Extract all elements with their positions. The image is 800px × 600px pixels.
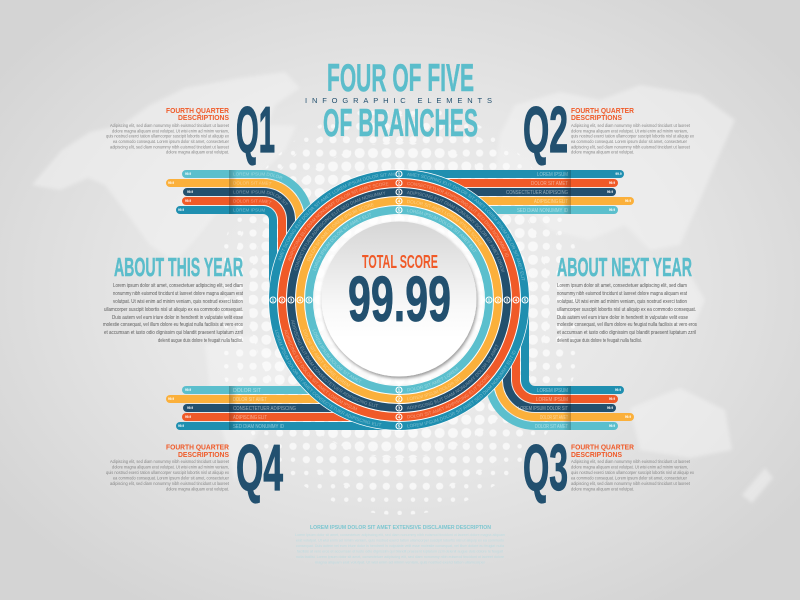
branch Q3 bars: DOLOR SIT AMET [540,415,568,421]
branch Q2 bars: 99.9 [615,172,622,176]
Q4 block: quis nostrud exerci tation ullamcorper suscipit lobortis nisl ut aliquip ex [106,470,230,475]
Q1 block: quis nostrud exerci tation ullamcorper suscipit lobortis nisl ut aliquip ex [106,134,230,139]
halftone dot field [214,105,584,515]
Q2 block: dolore magna aliquam erat volutpat. Ut wisi enim ad minim veniam, [571,128,688,133]
about this year: et accumsan et iusto odio dignissim qui blandit praesent luptatum zzril [104,330,243,336]
about this year: volutpat. Ut wisi enim ad minim veniam, quis nostrud exerci tation [113,299,243,305]
number nodes right: 2 [497,298,500,304]
Q2 block: quis nostrud exerci tation ullamcorper suscipit lobortis nisl ut aliquip ex [571,134,695,139]
concentric ring bands: AMET SCORING ELIT DOLOR SIT AMET LOREM IPSUM DOLOR SIT AMET ELIT [407,172,525,280]
number nodes left: 1 [272,298,275,304]
about next year: volutpat. Ut wisi enim ad minim veniam, quis nostrud exerci tation [557,299,687,305]
number nodes bottom [396,387,402,430]
branch Q2 bars: ADIPISCING ELIT [534,199,568,205]
Q3 block: DESCRIPTIONS [571,450,622,459]
number nodes left: 3 [290,298,293,304]
Q3 block: quis nostrud exerci tation ullamcorper suscipit lobortis nisl ut aliquip ex [571,470,695,475]
concentric ring bands: ADIPISCING ELIT DIAM CONSECTETUER ADIPISCING ELIT [291,320,378,408]
concentric ring bands: DOLOR SIT AMET ADIPISCING ELIT SCORE [407,374,490,418]
branch Q2 bars: 99.9 [607,190,613,194]
number nodes left: 2 [281,298,284,304]
branch Q2 bars: LOREM IPSUM [537,172,568,178]
Q2 block: DESCRIPTIONS [571,113,622,122]
branch Q3 bars: 99.9 [615,388,621,392]
about this year: ABOUT THIS YEAR [114,252,243,282]
branch Q1 bars: DOLOR SIT AMET [233,200,272,204]
number nodes right: 3 [506,298,509,304]
about next year: ullamcorper suscipit lobortis nisl ut aliquip ex ea commodo consequat. [557,307,696,313]
concentric ring bands: DOLOR SIT AMET LOREM IPSUM SCORE [306,203,374,262]
number nodes top: 3 [398,190,401,196]
Q4 block: dolore magna aliquam erat volutpat. Ut wisi enim ad minim veniam, [112,464,229,470]
branch Q2 bars: 99.9 [625,199,631,203]
branch Q1 bars: 99.9 [187,190,193,194]
Q1 block: dolore magna aliquam erat volutpat. [166,150,229,155]
Q1 block [106,93,275,166]
Q3 block: ea commodo consequat. Lorem ipsum dolor sit amet, consectetuer [571,476,687,480]
branch Q3 bars: LOREM IPSUM [537,388,568,394]
disclaimer [295,525,505,564]
number nodes right: 5 [524,298,527,304]
central score disc [314,215,484,385]
branch Q4 bars: 99.9 [178,424,184,428]
branch Q3 bars: 99.9 [607,406,613,410]
Q1 block: adipiscing elit, sed diam nonummy nibh euismod tincidunt ut laoreet [110,144,230,149]
about next year: delenit augue duis dolore te feugait nulla facilisi. [557,338,642,344]
branch Q2 bars: SED DIAM NONUMMY ID [517,208,568,214]
Q4 block: adipiscing elit, sed diam nonummy nibh euismod tincidunt ut laoreet [110,481,230,486]
branch Q1 bars: 99.9 [168,181,174,185]
about this year: nonummy nibh euismod tincidunt ut laoreet dolore magna aliquam erat [113,291,243,297]
branch Q1 bars: DOLOR SIT AMET [233,182,272,186]
concentric ring bands: LOREM IPSUM DOLOR SIT AMET [312,329,362,383]
number nodes bottom: 1 [398,388,401,394]
branch Q3 bars [489,300,631,430]
number nodes right: 4 [515,298,518,304]
concentric ring bands: ADIPISCING ELIT DIAM NONUMMY DOLOR SIT AMET SCORE [288,182,389,262]
concentric ring bands: LOREM IPSUM DOLOR SIT AMET SED DIAM NONUMMY ELIT ID [407,350,516,428]
number nodes left [270,297,312,304]
branch Q1 bars: 99.9 [185,172,191,176]
branch Q1 bars: 99.9 [185,199,191,203]
number nodes top [396,171,402,214]
number nodes bottom: 3 [398,406,401,412]
number nodes top: 5 [398,208,401,214]
Q2 block: ea commodo consequat. Lorem ipsum dolor sit amet, consectetuer [571,139,687,144]
concentric ring bands: CONSECTETUER ADIPISCING ELIT SED DIAM NONUMMY [294,191,386,270]
title [305,57,492,145]
concentric ring bands: LOREM IPSUM DOLOR SIT AMET ELIT [312,213,371,271]
about this year [103,252,243,344]
branch Q4 bars: 99.9 [187,406,193,410]
number nodes top: 1 [398,172,401,178]
Q1 block: ea commodo consequat. Lorem ipsum dolor sit amet, consectetuer [113,139,229,144]
branch Q4 bars: 99.9 [168,397,174,401]
about next year: Lorem ipsum dolor sit amet, consectetuer adipiscing elit, sed diam [557,283,687,289]
about next year: ABOUT NEXT YEAR [557,252,692,282]
about next year: Duis autem vel eum iriure dolor in hendrerit in vulputate velit esse [557,315,688,321]
about this year: ullamcorper suscipit lobortis nisl ut aliquip ex ea commodo consequat. [104,307,243,313]
number nodes bottom: 5 [398,424,401,430]
concentric ring bands [268,170,530,430]
number nodes bottom: 2 [398,397,401,403]
branch Q2 bars: 99.9 [609,181,615,185]
title: INFOGRAPHIC ELEMENTS [305,96,492,105]
Q4 block: DESCRIPTIONS [178,450,229,459]
Q3 block: Adipiscing elit, sed diam nonummy nibh euismod tincidunt ut laoreet [571,459,691,464]
Q4 block: dolore magna aliquam erat volutpat. [166,486,229,492]
fold shadows on bars [229,170,571,430]
branch Q4 bars: 99.9 [185,388,191,392]
concentric ring bands: ADIPISCING ELIT DIAM NONUMMY DOLOR SIT AMET LOREM [406,191,505,272]
concentric ring bands: LOREM IPSUM DOLOR SIT AMET ELIT [407,208,476,252]
number nodes right: 1 [488,298,491,304]
branch Q1 bars: 99.9 [178,208,184,212]
branch Q1 bars: LOREM IPSUM [233,208,265,212]
disclaimer: consequat. Duis autem vel eum iriure dolor in hendrerit in vulputate velit esse molestie consequat, vel illum dolore eu feugiat nulla [296,543,505,548]
branch Q3 bars: LOREM IPSUM [536,397,568,403]
disclaimer: nulla facilisi. Lorem ipsum dolor sit amet, consectetuer adipiscing elit, sed diam nonummy nibh euismod tincidunt ut laoreet dolore [296,554,504,559]
branch Q3 bars: DOLOR SIT AMET [535,424,568,430]
Q1 block: dolore magna aliquam erat volutpat. Ut wisi enim ad minim veniam, [112,128,229,133]
Q4 block: ea commodo consequat. Lorem ipsum dolor sit amet, consectetuer [113,476,229,480]
Q3 block: FOURTH QUARTER [571,442,634,452]
Q1 block: FOURTH QUARTER [166,106,229,115]
branch Q1 bars: LOREM IPSUM DOLOR SIT [233,190,288,206]
concentric ring bands: DOLOR SIT AMET LOREM [407,367,458,392]
title: FOUR OF FIVE [327,57,474,100]
world map [32,72,773,503]
disclaimer: magna aliquam erat volutpat. Ut wisi enim ad minim veniam, quis nostrud exerci tation ullamcorper [315,560,486,564]
concentric ring bands: LOREM IPSUM DOLOR SIT [407,376,460,400]
disclaimer: erat volutpat. Ut wisi enim ad minim veniam, quis nostrud exerci tation ullamcorper suscipit lobortis nisl ut aliquip ex ea commodo [296,538,504,542]
Q2 block: Q2 [523,93,568,166]
disclaimer: facilisis at vero eros et accumsan et iusto odio dignissim qui blandit praesent luptatum zzril delenit augue duis dolore te feugait [297,548,504,554]
Q3 block: dolore magna aliquam erat volutpat. [571,486,634,492]
branch Q4 bars: CONSECTETUER ADIPISCING [233,406,296,412]
Q3 block: dolore magna aliquam erat volutpat. Ut wisi enim ad minim veniam, [571,464,688,470]
concentric ring bands: LOREM IPSUM DOLOR SIT AMET CONSECTETUER ADIPISCING ELIT [275,330,382,426]
concentric ring bands: ADIPISCING ELIT DIAM NONUMMY DOLOR SIT AMET [407,344,498,410]
concentric ring bands: DOLOR SIT AMET SCORE LOREM [303,329,350,387]
branch Q3 bars: 99.9 [625,415,631,419]
Q4 block [106,431,283,504]
branch Q4 bars [168,388,399,430]
number nodes top: 4 [398,199,401,205]
about this year: molestie consequat, vel illum dolore eu feugiat nulla facilisis at vero eros [103,322,243,328]
number nodes top: 2 [398,181,401,187]
about next year: nonummy nibh euismod tincidunt ut laoreet dolore magna aliquam erat [557,291,687,297]
Q4 block: Adipiscing elit, sed diam nonummy nibh euismod tincidunt ut laoreet [110,459,230,464]
Q1 block: DESCRIPTIONS [178,113,229,122]
disclaimer: LOREM IPSUM DOLOR SIT AMET EXTENSIVE DISCLAIMER DESCRIPTION [310,525,491,531]
text: Q1 [236,93,275,166]
Q3 block: Q3 [523,431,568,504]
Q1 block: Adipiscing elit, sed diam nonummy nibh euismod tincidunt ut laoreet [110,123,230,128]
score value: 99.99 [348,263,451,335]
concentric ring bands: CONSECTETUER ADIPISCING ELIT SED DIAM NONUMMY ID [407,182,509,257]
branch Q2 bars: DOLOR SIT AMET [531,181,568,187]
branch Q4 bars: ADIPISCING ELIT [233,415,267,421]
concentric ring bands: AMET SCORING ELIT DOLOR SIT AMET LOREM IPSUM DOLOR SIT AMET [278,172,396,262]
branch Q3 bars: 99.9 [609,397,615,401]
about next year: molestie consequat, vel illum dolore eu feugiat nulla facilisis at vero eros [557,322,697,328]
branch Q4 bars: DOLOR SIT AMET [233,397,267,403]
concentric ring bands: ADIPISCING ELIT DOLOR SIT AMET LOREM IPSUM [284,330,358,410]
Q3 block [523,431,695,504]
branch Q4 bars: SED DIAM NONUMMY ID [233,424,284,430]
branch Q4 bars: 99.9 [185,415,191,419]
branch Q4 bars: DOLOR SIT [233,388,261,394]
branch Q1 bars: LOREM IPSUM DOLOR [233,172,282,180]
Q4 block: FOURTH QUARTER [166,442,229,452]
branch Q1 bars [166,170,310,286]
about next year: et accumsan et iusto odio dignissim qui blandit praesent luptatum zzril [557,330,696,336]
disclaimer: Lorem ipsum dolor sit amet, consectetuer adipiscing elit, sed diam nonummy nibh euismod tincidunt ut laoreet dolore magna aliquam [295,532,505,537]
branch Q2 bars [399,172,631,214]
number nodes left: 5 [308,298,311,304]
Q2 block: FOURTH QUARTER [571,106,634,115]
number nodes right [486,297,528,304]
about this year: Lorem ipsum dolor sit amet, consectetuer adipiscing elit, sed diam [113,283,243,289]
branch Q3 bars: 99.9 [609,424,615,428]
number nodes bottom: 4 [398,415,401,421]
about this year: Duis autem vel eum iriure dolor in hendrerit in vulputate velit esse [112,315,243,321]
Q4 block: Q4 [236,431,283,504]
Q2 block: adipiscing elit, sed diam nonummy nibh euismod tincidunt ut laoreet [571,144,691,149]
number nodes left: 4 [299,298,302,304]
Q3 block: adipiscing elit, sed diam nonummy nibh euismod tincidunt ut laoreet [571,481,691,486]
Q2 block [523,93,695,166]
branch Q3 bars: LOREM IPSUM DOLOR SIT [518,406,568,412]
total score label: TOTAL SCORE [362,251,438,272]
concentric ring bands: DOLOR SIT AMET LOREM IPSUM SCORE [407,200,483,246]
Q2 block: dolore magna aliquam erat volutpat. [571,150,634,155]
Q2 block: Adipiscing elit, sed diam nonummy nibh euismod tincidunt ut laoreet [571,123,691,128]
about this year: delenit augue duis dolore te feugait nulla facilisi. [158,338,243,344]
branch Q2 bars: 99.9 [609,208,615,212]
title: OF BRANCHES [323,102,478,145]
about next year [557,252,697,344]
branch Q2 bars: CONSECTETUER ADIPISCING [506,190,568,196]
